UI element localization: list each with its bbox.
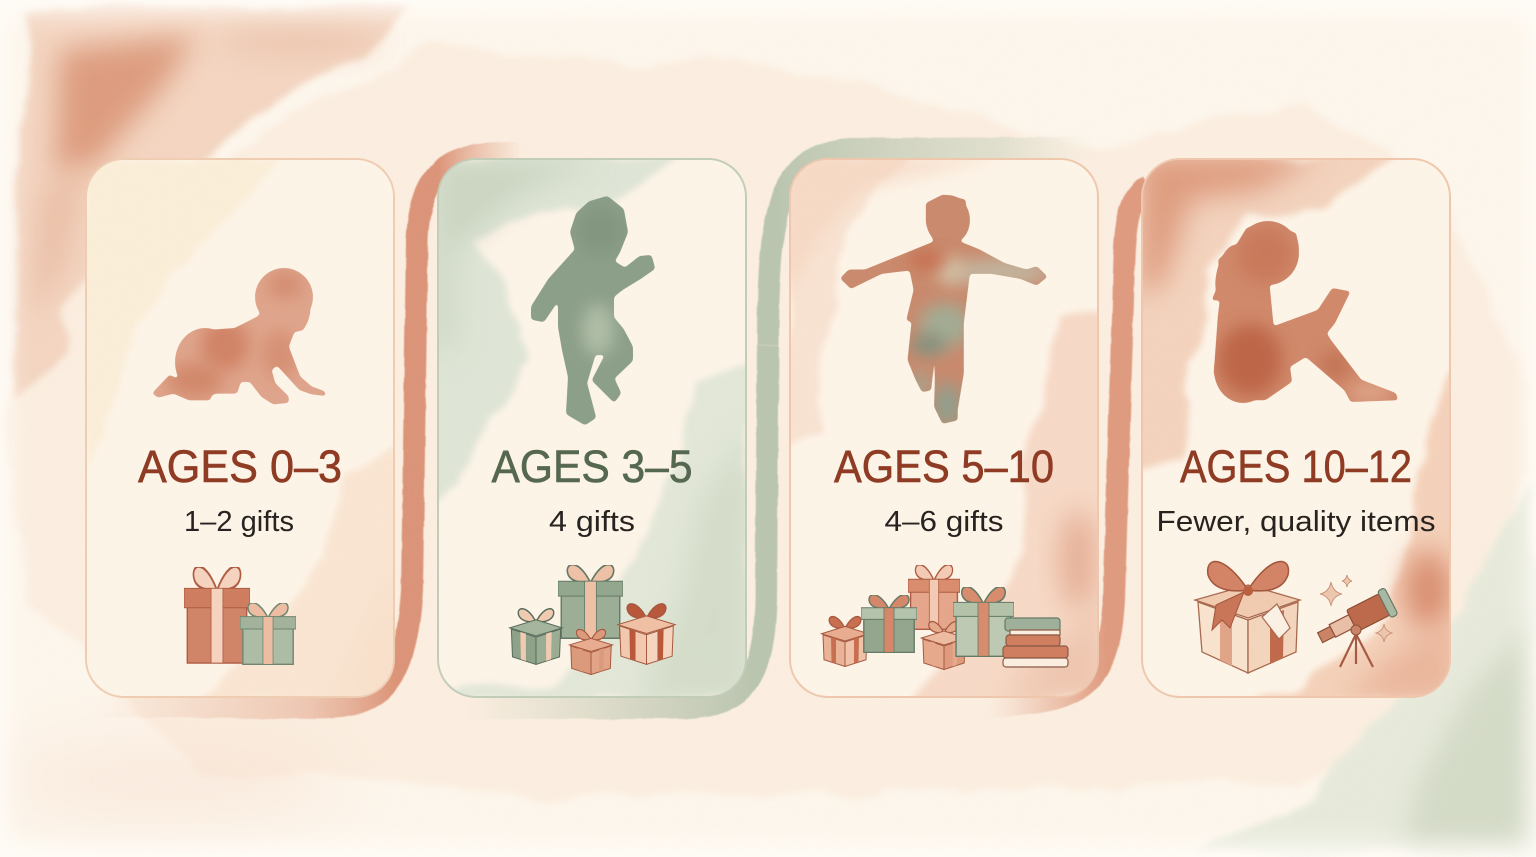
icon: back green gift <box>558 565 623 638</box>
watercolor wash: bottom right green <box>1190 480 1536 857</box>
panel: ages 0-3 <box>80 159 400 700</box>
gift count: 4-6 gifts: 4–6 gifts <box>884 506 1004 538</box>
icon: right peach gift <box>618 604 675 664</box>
gift count: 4 gifts: 4 gifts <box>549 506 635 538</box>
offset brush strip: card 4 <box>990 186 1148 706</box>
heading: ages 10-12: AGES 10–12 <box>1180 441 1412 492</box>
heading: ages 0-3: AGES 0–3 <box>138 441 342 492</box>
icon: left terracotta gift <box>822 617 868 666</box>
heading: ages 3-5: AGES 3–5 <box>492 441 692 492</box>
icon: telescope <box>1313 588 1398 667</box>
offset brush strip: card 3 green <box>768 148 1095 345</box>
panel: ages 10-12 <box>1135 155 1455 700</box>
offset brush strip: card 2 green <box>465 345 768 708</box>
silhouette: walking toddler <box>530 196 655 425</box>
offset brush strip: card 1 <box>95 153 520 708</box>
watercolor wash: top left terracotta <box>15 5 410 400</box>
icon: green gift <box>861 595 917 652</box>
icon: large gift <box>184 567 250 663</box>
silhouette: girl reading <box>1212 221 1398 403</box>
icon: top terracotta gift <box>908 565 960 629</box>
icon: small green gift <box>240 603 296 664</box>
icon: small gift <box>921 621 967 670</box>
icon: book stack <box>1003 618 1068 667</box>
icon: sparkles <box>1320 575 1392 642</box>
panel: ages 5-10 <box>785 155 1105 700</box>
icon: large premium gift <box>1195 561 1300 673</box>
panel: ages 3-5 <box>430 155 750 700</box>
silhouette: crawling baby <box>153 268 326 404</box>
heading: ages 5-10: AGES 5–10 <box>834 441 1054 492</box>
silhouette: running child <box>841 194 1046 424</box>
gift count: fewer, quality items: Fewer, quality items <box>1156 506 1436 538</box>
icon: small terracotta gift <box>569 629 613 675</box>
icon: left green gift <box>510 609 562 664</box>
gift count: 1-2 gifts: 1–2 gifts <box>184 506 294 538</box>
icon: right green gift <box>953 587 1014 656</box>
